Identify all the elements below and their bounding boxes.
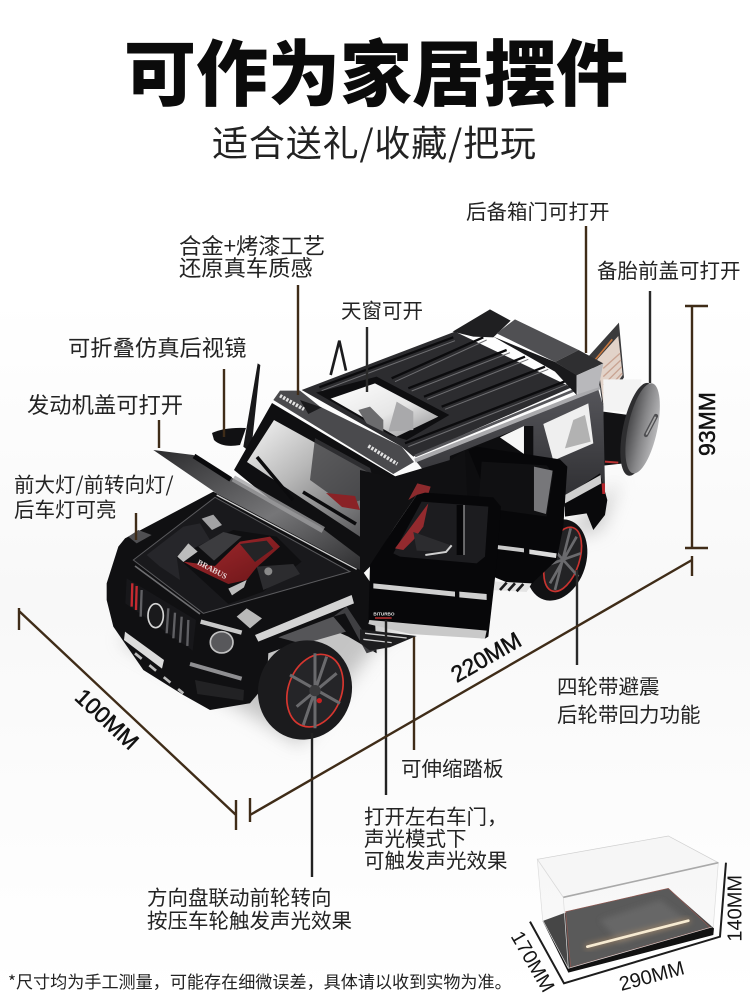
display case <box>506 836 747 996</box>
dimension: length 220MM <box>250 556 692 822</box>
dimension: width 100MM <box>19 608 236 830</box>
grille <box>125 578 196 651</box>
callout: sunroof: 天窗可开 <box>341 294 423 324</box>
rear side window <box>543 403 593 461</box>
front door open <box>368 493 501 639</box>
callout: lights: 后车灯可亮 <box>14 493 116 523</box>
callout: doors: 打开左右车门， <box>364 800 508 830</box>
body side <box>415 389 605 507</box>
red seat <box>395 503 428 550</box>
callout: suspension: 四轮带避震 <box>557 670 660 700</box>
case floor <box>566 888 710 967</box>
callout: folding mirror: 可折叠仿真后视镜 <box>68 331 246 363</box>
bumper details <box>135 653 244 701</box>
lamp trim <box>201 622 242 633</box>
callout: steering <box>147 733 352 934</box>
footnote: *尺寸均为手工测量，可能存在细微误差，具体请以收到实物为准。 <box>8 968 512 993</box>
A pillar and door opening <box>360 450 468 577</box>
callout: doors <box>364 620 508 874</box>
roof <box>302 332 572 457</box>
interior opening <box>447 426 533 507</box>
rear wheel <box>516 473 607 609</box>
windshield frame <box>234 403 398 572</box>
case label depth: 170MM <box>506 928 558 996</box>
rear and upper car parts <box>243 309 667 507</box>
callout: lights: 前大灯/前转向灯/ <box>14 468 174 498</box>
case base <box>543 888 714 973</box>
subtitle: 适合送礼/收藏/把玩 <box>212 115 536 167</box>
case label width: 290MM <box>617 957 687 996</box>
case label height: 140MM <box>725 875 747 942</box>
rear fender and bumper <box>565 473 607 530</box>
engine <box>147 515 302 604</box>
callout: lights <box>14 468 174 540</box>
dimension: width 100MM: 100MM <box>70 683 144 755</box>
callout: doors: 声光模式下 <box>364 822 466 852</box>
spare wheel <box>613 380 667 479</box>
callout: sunroof <box>341 294 423 392</box>
callout: steering: 方向盘联动前轮转向 <box>147 881 332 911</box>
case dimension lines <box>530 863 726 983</box>
car model illustration <box>107 309 667 753</box>
callout: hood: 发动机盖可打开 <box>27 388 183 420</box>
callout: alloy and paint: 合金+烤漆工艺 <box>179 229 325 261</box>
fender highlight <box>278 617 346 644</box>
far side mirror <box>212 428 246 446</box>
plate <box>124 632 164 669</box>
front wheel <box>244 627 366 753</box>
cabin interior through glass <box>310 438 378 505</box>
raised hood <box>153 450 363 572</box>
far door frame <box>331 341 346 375</box>
engine brand: BRABUS <box>196 558 229 581</box>
ground shadow <box>120 480 620 745</box>
hood lip <box>135 566 200 614</box>
doors and side <box>360 447 567 651</box>
rear hub and mechanics <box>603 379 642 413</box>
rear door open <box>467 447 567 592</box>
fender trim <box>255 595 354 642</box>
dimension: height 93MM: 93MM <box>694 392 720 456</box>
front roof visor with LED bars <box>273 391 414 477</box>
rear spoiler <box>453 309 603 395</box>
callout: spare wheel cover: 备胎前盖可打开 <box>597 254 740 284</box>
dimension: height 93MM <box>685 306 720 548</box>
dimension: length 220MM: 220MM <box>446 627 526 687</box>
callout: tailgate: 后备箱门可打开 <box>466 195 610 225</box>
sunroof <box>316 377 449 440</box>
callout: doors: 可触发声光效果 <box>364 844 508 874</box>
roof ribs <box>319 337 570 447</box>
callout: running board: 可伸缩踏板 <box>401 752 504 782</box>
door badge: BITURBO <box>373 612 395 617</box>
opened tailgate <box>588 323 624 411</box>
engine bay <box>133 497 350 613</box>
striped step <box>492 581 532 592</box>
callout: suspension: 后轮带回力功能 <box>557 698 700 728</box>
near door edge <box>243 363 260 449</box>
LED strip <box>587 921 688 947</box>
windshield glass <box>247 420 386 538</box>
callout: alloy and paint: 还原真车质感 <box>179 251 313 283</box>
running board <box>360 629 417 651</box>
callout: suspension <box>557 570 700 728</box>
roof edge trim <box>415 387 600 461</box>
indicator lamps <box>237 608 262 628</box>
title: 可作为家居摆件 <box>124 16 628 121</box>
headlight <box>210 632 233 653</box>
front body <box>107 450 377 753</box>
callout: steering: 按压车轮触发声光效果 <box>147 904 352 934</box>
callout: alloy and paint <box>179 229 325 395</box>
hull <box>107 492 377 710</box>
glass cover <box>537 836 718 897</box>
